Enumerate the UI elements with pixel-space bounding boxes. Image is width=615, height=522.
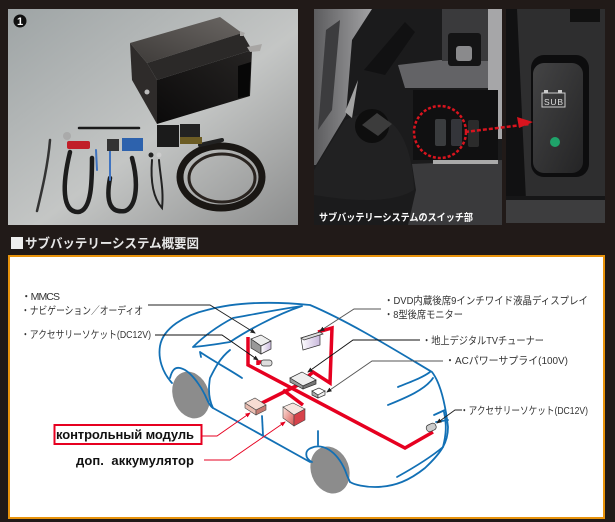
photo: dashboard switch location bbox=[314, 9, 502, 225]
TV tuner bbox=[290, 372, 316, 389]
relay and fuses bbox=[63, 124, 202, 158]
body lines bbox=[160, 303, 448, 487]
ignition bbox=[355, 109, 389, 143]
heading: サブバッテリーシステム概要図 bbox=[25, 236, 199, 251]
icon: SUB battery bbox=[542, 90, 565, 107]
label: rear seat display: ・DVD内蔵後席9インチワイド液晶ディスプレイ bbox=[384, 294, 588, 307]
icon: SUB battery: SUB bbox=[544, 97, 563, 107]
red dashed circle bbox=[414, 106, 466, 158]
icon: number 1 badge bbox=[14, 14, 26, 28]
sub battery bbox=[283, 403, 305, 426]
monitor bbox=[301, 332, 323, 350]
rear socket bbox=[425, 422, 437, 433]
arrow: switch to close-up bbox=[465, 117, 533, 132]
stalk bbox=[364, 22, 415, 75]
photo: switch close-up bbox=[506, 9, 605, 223]
label: rear accessory socket: ・アクセサリーソケット(DC12V) bbox=[460, 405, 588, 417]
label: MMCS: ・MMCS bbox=[21, 291, 60, 303]
switches bbox=[435, 119, 446, 146]
front socket bbox=[261, 360, 272, 366]
steering wheel rim bbox=[314, 9, 372, 165]
green indicator bbox=[550, 137, 560, 147]
wheels bbox=[166, 366, 216, 424]
label: front accessory socket: ・アクセサリーソケット(DC12V) bbox=[21, 329, 151, 341]
callout: control module: контрольный модуль bbox=[56, 427, 194, 442]
battery box bbox=[130, 17, 262, 124]
icon: number 1 badge: 1 bbox=[17, 16, 23, 28]
label: navigation and audio: ・ナビゲーション／オーディオ bbox=[21, 304, 143, 317]
control module bbox=[245, 398, 266, 415]
cables and connectors bbox=[37, 128, 262, 212]
AC power supply bbox=[312, 388, 325, 398]
dash panel bbox=[398, 60, 488, 88]
panel: system diagram bbox=[9, 256, 604, 518]
label: AC power supply: ・ACパワーサプライ(100V) bbox=[445, 355, 568, 367]
MMCS unit bbox=[251, 335, 271, 354]
red wiring bbox=[248, 328, 433, 448]
caption: サブバッテリーシステムのスイッチ部 bbox=[319, 211, 473, 224]
label: digital TV tuner: ・地上デジタルTVチューナー bbox=[422, 334, 544, 347]
switch body bbox=[533, 63, 583, 173]
switch recess bbox=[531, 55, 589, 177]
callout: auxiliary battery: доп. аккумулятор bbox=[76, 453, 194, 468]
car illustration bbox=[160, 303, 448, 499]
leader lines bbox=[148, 305, 462, 460]
steering column bbox=[314, 114, 414, 200]
photo: sub-battery kit bbox=[8, 9, 298, 225]
label: rear monitor: ・8型後席モニター bbox=[384, 308, 463, 321]
